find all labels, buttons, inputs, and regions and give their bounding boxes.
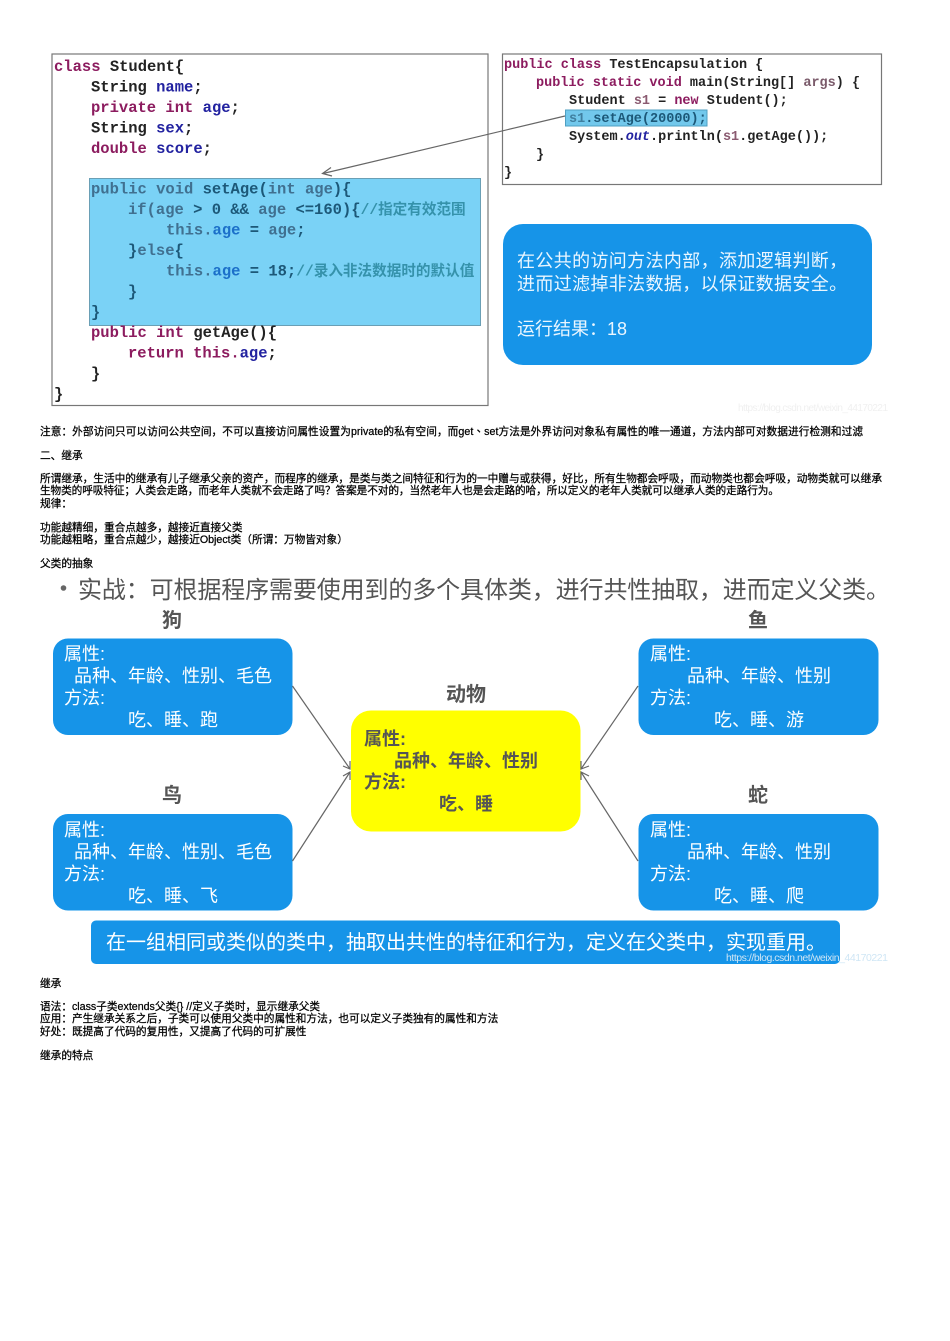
banner: reuse summary: 在一组相同或类似的类中，抽取出共性的特征和行为，定义在父类中，实现重用。 — [106, 931, 826, 954]
card: dog: 吃、睡、跑 — [128, 710, 218, 730]
card: fish: 品种、年龄、性别 — [687, 666, 831, 686]
paragraph: what inheritance means: 生物类的呼吸特征；人类会走路，而老年人类就不会走路了吗？答案是不对的，当然老年人也是会走路的哈，所以定义的老年人类就可以继承人类的走路行为。 — [40, 484, 779, 497]
card: fish: 吃、睡、游 — [714, 710, 804, 730]
note on access: 注意：外部访问只可以访问公共空间，不可以直接访问属性设置为private的私有空间，而get、set方法是外界访问对象私有属性的唯一通道，方法内部可对数据进行检测和过滤 — [40, 425, 863, 438]
arrow: setAge call to setAge method — [322, 116, 565, 176]
heading: inheritance characteristics: 继承的特点 — [40, 1049, 94, 1062]
panel: TestEncapsulation code: } — [536, 148, 544, 163]
arrow: bird to animal — [292, 772, 350, 861]
heading: section two inheritance: 二、继承 — [40, 449, 83, 462]
text block: rules: 功能越粗略，重合点越少，越接近Object类（所谓：万物皆对象） — [40, 533, 348, 546]
arrow: dog to animal — [292, 686, 350, 769]
panel: Student class code: }else{ — [128, 242, 184, 260]
paragraph: what inheritance means: 规律： — [40, 497, 72, 510]
card: snake: 方法: — [650, 864, 691, 884]
card: animal parent class: 动物 — [446, 683, 486, 706]
panel: TestEncapsulation code — [502, 54, 882, 184]
heading: inheritance: 继承 — [40, 977, 62, 990]
banner: reuse summary: https://blog.csdn.net/weixin_44170221 — [726, 952, 888, 964]
panel: Student class code: class Student{ — [54, 58, 184, 76]
heading: practical summary: 实战：可根据程序需要使用到的多个具体类，进行共性抽取，进而定义父类。 — [78, 577, 890, 604]
paragraph: what inheritance means: 所谓继承，生活中的继承有儿子继承父亲的资产，而程序的继承，是类与类之间特征和行为的一中赠与或获得，好比，所有生物都会呼吸，而动物类也都会呼吸，动物类就可以继承 — [40, 472, 882, 485]
card: animal parent class: 方法: — [364, 771, 406, 792]
card: animal parent class: 品种、年龄、性别 — [394, 750, 538, 771]
card: snake — [638, 783, 878, 910]
text block: syntax, application, benefits — [40, 1000, 499, 1038]
panel: Student class code: } — [54, 386, 63, 404]
panel: Student class code: } — [91, 365, 100, 383]
panel: Student class code: String sex; — [91, 120, 193, 138]
text block: syntax, application, benefits: 应用：产生继承关系之后，子类可以使用父类中的属性和方法，也可以定义子类独有的属性和方法 — [40, 1012, 499, 1025]
card: animal parent class — [351, 683, 580, 832]
panel: Student class code: if(age > 0 && age <=160){//指定有效范围 — [128, 200, 466, 219]
card: snake: 吃、睡、爬 — [714, 886, 804, 906]
arrow: snake to animal — [581, 772, 638, 861]
card: snake: 属性: — [650, 820, 691, 840]
panel: Student class code: public void setAge(int age){ — [91, 180, 351, 198]
card: bird — [53, 784, 292, 910]
card: bird: 吃、睡、飞 — [128, 886, 218, 906]
callout: data validation explanation: 进而过滤掉非法数据，以保证数据安全。 — [517, 274, 847, 294]
text block: syntax, application, benefits: 好处：既提高了代码的复用性，又提高了代码的可扩展性 — [40, 1025, 307, 1038]
panel: Student class code: return this.age; — [128, 344, 277, 362]
card: fish: 方法: — [650, 688, 691, 708]
card: bird: 鸟 — [162, 784, 182, 807]
card: dog: 狗 — [162, 609, 182, 632]
heading: parent class abstraction: 父类的抽象 — [40, 557, 94, 570]
card: animal parent class: 属性: — [364, 729, 406, 749]
text block: rules — [40, 521, 348, 546]
panel: TestEncapsulation code: public static void main(String[] args) { — [536, 76, 860, 91]
watermark: top image: https://blog.csdn.net/weixin_44170221 — [738, 403, 888, 414]
card: animal parent class: 吃、睡 — [439, 794, 493, 814]
card: dog: 品种、年龄、性别、毛色 — [74, 666, 272, 686]
text block: rules: 功能越精细，重合点越多，越接近直接父类 — [40, 521, 243, 534]
text block: syntax, application, benefits: 语法：class子类extends父类{} //定义子类时，显示继承父类 — [40, 1000, 320, 1013]
panel: Student class code: public int getAge(){ — [91, 324, 277, 342]
card: bird: 方法: — [64, 864, 105, 884]
card: dog: 方法: — [64, 688, 105, 708]
callout: data validation explanation — [503, 224, 872, 365]
card: snake: 品种、年龄、性别 — [687, 842, 831, 862]
panel: TestEncapsulation code: Student s1 = new Student(); — [569, 94, 788, 109]
card: dog — [53, 609, 292, 735]
card: bird: 属性: — [64, 820, 105, 840]
card: snake: 蛇 — [748, 783, 768, 807]
panel: TestEncapsulation code: } — [504, 166, 512, 181]
card: fish: 属性: — [650, 644, 691, 664]
panel: Student class code: String name; — [91, 78, 203, 96]
panel: TestEncapsulation code: s1.setAge(20000); — [569, 112, 707, 127]
paragraph: what inheritance means — [40, 472, 882, 510]
callout: data validation explanation: 在公共的访问方法内部，添加逻辑判断， — [517, 251, 847, 271]
callout: data validation explanation: 运行结果：18 — [517, 319, 627, 339]
panel: Student class code: this.age = age; — [166, 222, 306, 240]
panel: Student class code — [52, 54, 488, 406]
banner: reuse summary — [91, 920, 888, 964]
arrow: fish to animal — [581, 686, 638, 769]
panel: Student class code: } — [91, 304, 100, 322]
card: dog: 属性: — [64, 644, 105, 664]
card: fish — [638, 609, 878, 735]
card: fish: 鱼 — [748, 609, 768, 632]
panel: Student class code: this.age = 18;//录入非法数据时的默认值 — [166, 262, 475, 280]
panel: TestEncapsulation code: System.out.println(s1.getAge()); — [569, 130, 828, 145]
panel: Student class code: } — [128, 283, 137, 301]
panel: TestEncapsulation code: public class TestEncapsulation { — [504, 58, 763, 73]
panel: Student class code: double score; — [91, 140, 212, 158]
card: bird: 品种、年龄、性别、毛色 — [74, 842, 272, 862]
panel: Student class code: private int age; — [91, 99, 240, 117]
